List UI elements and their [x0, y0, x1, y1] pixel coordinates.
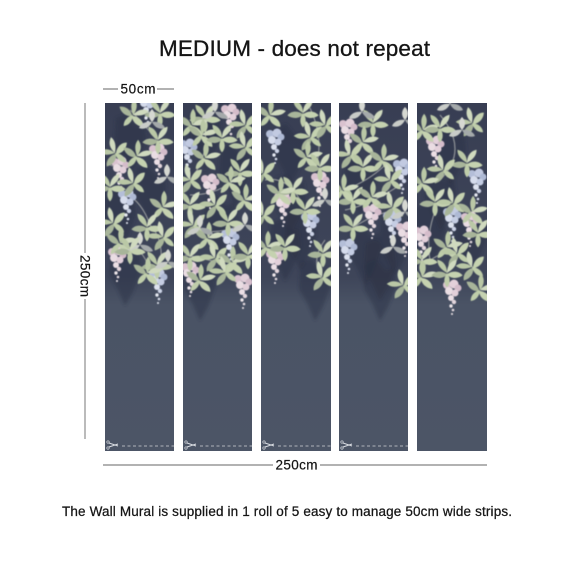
- strip 2: [183, 103, 252, 451]
- strip 3: [261, 103, 331, 451]
- strip 5: [417, 103, 487, 451]
- height dimension: 250cm: 250cm: [78, 255, 92, 297]
- width dimension: 50cm: 50cm: [120, 82, 156, 96]
- title: MEDIUM - does not repeat: [159, 36, 431, 61]
- caption: The Wall Mural is supplied in 1 roll of 5 easy to manage 50cm wide strips.: [62, 504, 512, 519]
- strip 4: [339, 103, 408, 451]
- total width dimension: 250cm: 250cm: [276, 458, 318, 472]
- width dimension: 50cm: [103, 82, 174, 96]
- strip 1: [105, 103, 174, 451]
